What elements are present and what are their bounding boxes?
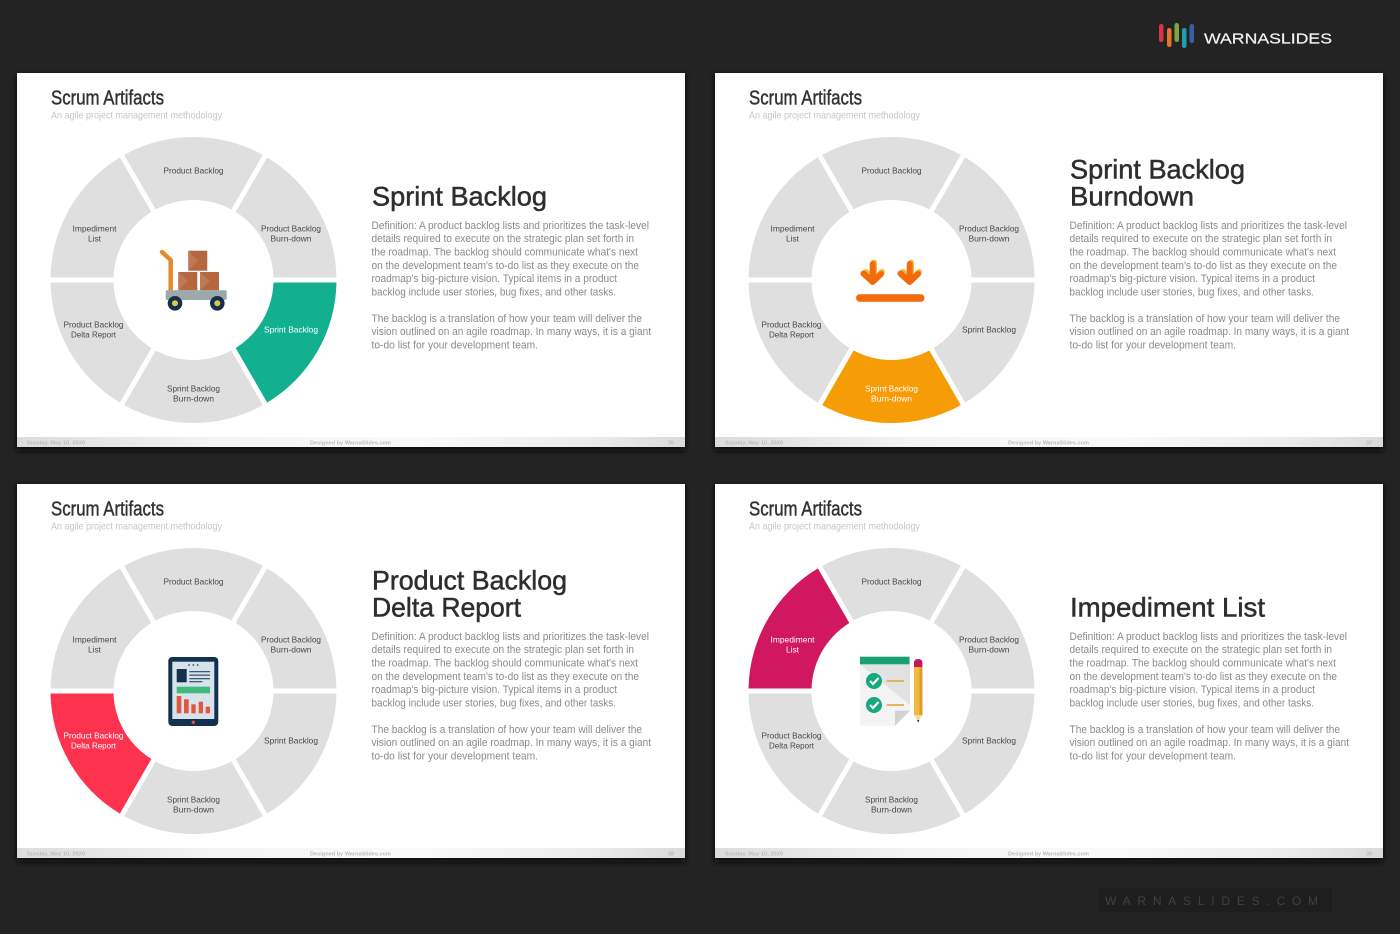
body text xyxy=(372,220,651,352)
body text: details required to execute on the strategic plan set forth in xyxy=(1070,233,1332,245)
donut chart: Delta Report xyxy=(71,329,117,339)
body text: The backlog is a translation of how your team will deliver the xyxy=(372,724,642,736)
body text: backlog include user stories, bug fixes, and other tasks. xyxy=(372,287,616,299)
footer: 38 xyxy=(668,852,674,858)
donut chart: Sprint Backlog xyxy=(264,735,318,745)
donut chart: Sprint Backlog xyxy=(865,383,918,393)
body text: Definition: A product backlog lists and prioritizes the task-level xyxy=(372,631,649,643)
donut chart: Product Backlog xyxy=(64,730,124,740)
footer: 39 xyxy=(1366,852,1372,858)
body text: the roadmap. The backlog should communicate what's next xyxy=(372,658,638,670)
body text: The backlog is a translation of how your team will deliver the xyxy=(1070,724,1340,736)
footer: Sunday, May 10, 2020 xyxy=(725,852,783,858)
donut chart: List xyxy=(88,233,102,243)
heading: Sprint Backlog xyxy=(372,182,547,212)
footer xyxy=(725,852,1372,858)
footer: Sunday, May 10, 2020 xyxy=(27,852,85,858)
body text: details required to execute on the strategic plan set forth in xyxy=(1070,644,1332,656)
donut chart: Product Backlog xyxy=(959,223,1019,233)
heading: Impediment List xyxy=(1070,592,1265,622)
footer: Sunday, May 10, 2020 xyxy=(725,440,783,446)
slide title xyxy=(51,88,223,121)
donut chart xyxy=(16,506,371,876)
slide title xyxy=(749,88,921,121)
body text xyxy=(372,631,651,763)
footer: Designed by WarnaSlides.com xyxy=(1008,852,1089,858)
slide: Sprint Backlog xyxy=(16,73,685,465)
body text: to-do list for your development team. xyxy=(1070,340,1236,352)
icon: checklist and pencil xyxy=(860,657,922,726)
donut chart: Delta Report xyxy=(71,740,117,750)
slide title: Scrum Artifacts xyxy=(749,88,862,110)
donut chart: Burn-down xyxy=(173,804,214,814)
icon: tablet with report xyxy=(168,657,218,726)
donut chart: Delta Report xyxy=(769,329,815,339)
body text: The backlog is a translation of how your team will deliver the xyxy=(1070,313,1340,325)
donut chart: List xyxy=(88,644,102,654)
donut chart: Product Backlog xyxy=(164,165,224,175)
slide title: An agile project management methodology xyxy=(749,520,921,532)
donut chart: Delta Report xyxy=(769,740,815,750)
heading: Product Backlog xyxy=(372,566,567,596)
body text: details required to execute on the strategic plan set forth in xyxy=(372,233,634,245)
donut chart: Product Backlog xyxy=(164,576,224,586)
watermark: warnaslides.com xyxy=(1098,888,1332,912)
body text: on the development team's to-do list as they execute on the xyxy=(1070,260,1337,272)
heading xyxy=(372,566,567,622)
body text: roadmap's big-picture vision. Typical items in a product xyxy=(372,684,617,696)
donut chart xyxy=(714,506,1069,876)
body text: details required to execute on the strategic plan set forth in xyxy=(372,644,634,656)
donut chart: Burn-down xyxy=(871,393,912,403)
donut chart: Sprint Backlog xyxy=(264,324,318,334)
footer: Designed by WarnaSlides.com xyxy=(1008,440,1089,446)
footer: Designed by WarnaSlides.com xyxy=(310,440,391,446)
donut chart: Impediment xyxy=(770,634,815,644)
body text: on the development team's to-do list as they execute on the xyxy=(372,260,639,272)
body text: the roadmap. The backlog should communicate what's next xyxy=(372,247,638,259)
donut chart: Impediment xyxy=(770,223,815,233)
footer: Designed by WarnaSlides.com xyxy=(310,852,391,858)
slide title xyxy=(51,499,223,532)
body text xyxy=(1070,631,1349,763)
body text: backlog include user stories, bug fixes, and other tasks. xyxy=(1070,698,1314,710)
footer: 37 xyxy=(1366,440,1372,446)
icon: down arrows over bar xyxy=(856,262,924,302)
heading: Sprint Backlog xyxy=(1070,154,1245,184)
slide title: Scrum Artifacts xyxy=(51,499,164,521)
slide title: An agile project management methodology xyxy=(51,109,223,121)
body text: Definition: A product backlog lists and prioritizes the task-level xyxy=(1070,631,1347,643)
body text: the roadmap. The backlog should communicate what's next xyxy=(1070,658,1336,670)
slide title: Scrum Artifacts xyxy=(749,499,862,521)
body text: Definition: A product backlog lists and prioritizes the task-level xyxy=(372,220,649,232)
body text: on the development team's to-do list as they execute on the xyxy=(372,671,639,683)
footer xyxy=(725,440,1372,446)
donut chart: Sprint Backlog xyxy=(167,383,220,393)
slide: Product Backlog Delta Report xyxy=(16,484,685,876)
footer xyxy=(27,440,674,446)
body text: to-do list for your development team. xyxy=(372,751,538,763)
slide title: An agile project management methodology xyxy=(51,520,223,532)
body text: vision outlined on an agile roadmap. In many ways, it is a giant xyxy=(1070,737,1349,749)
body text: on the development team's to-do list as they execute on the xyxy=(1070,671,1337,683)
body text xyxy=(1070,220,1349,352)
donut chart: Sprint Backlog xyxy=(167,794,220,804)
footer xyxy=(27,852,674,858)
footer: 36 xyxy=(668,440,674,446)
donut chart xyxy=(16,95,371,465)
donut chart: Burn-down xyxy=(968,233,1010,243)
heading xyxy=(1070,154,1245,212)
donut chart: Burn-down xyxy=(871,804,912,814)
body text: backlog include user stories, bug fixes, and other tasks. xyxy=(372,698,616,710)
body text: roadmap's big-picture vision. Typical items in a product xyxy=(1070,273,1315,285)
donut chart: List xyxy=(786,644,800,654)
donut chart: Product Backlog xyxy=(261,634,321,644)
heading: Burndown xyxy=(1070,182,1194,212)
donut chart: Product Backlog xyxy=(261,223,321,233)
donut chart: List xyxy=(786,233,800,243)
donut chart: Impediment xyxy=(72,223,117,233)
body text: The backlog is a translation of how your team will deliver the xyxy=(372,313,642,325)
donut chart: Product Backlog xyxy=(862,576,922,586)
watermark: warnaslides.com: WARNASLIDES.COM xyxy=(1105,894,1318,908)
donut chart: Product Backlog xyxy=(762,730,822,740)
slide: Sprint Backlog Burndown xyxy=(714,73,1383,465)
body text: the roadmap. The backlog should communicate what's next xyxy=(1070,247,1336,259)
body text: Definition: A product backlog lists and prioritizes the task-level xyxy=(1070,220,1347,232)
body text: vision outlined on an agile roadmap. In many ways, it is a giant xyxy=(372,326,651,338)
donut chart: Product Backlog xyxy=(862,165,922,175)
logo: WarnaSlides: WARNASLIDES xyxy=(1204,30,1332,48)
donut chart: Burn-down xyxy=(270,233,312,243)
slide title: An agile project management methodology xyxy=(749,109,921,121)
icon: hand cart with boxes xyxy=(162,251,227,311)
donut chart: Impediment xyxy=(72,634,117,644)
body text: vision outlined on an agile roadmap. In many ways, it is a giant xyxy=(372,737,651,749)
donut chart: Sprint Backlog xyxy=(962,735,1016,745)
donut chart: Product Backlog xyxy=(959,634,1019,644)
donut chart: Product Backlog xyxy=(762,319,822,329)
donut chart xyxy=(714,95,1069,465)
body text: backlog include user stories, bug fixes, and other tasks. xyxy=(1070,287,1314,299)
donut chart: Burn-down xyxy=(270,644,312,654)
footer: Sunday, May 10, 2020 xyxy=(27,440,85,446)
donut chart: Sprint Backlog xyxy=(865,794,918,804)
body text: to-do list for your development team. xyxy=(1070,751,1236,763)
donut chart: Product Backlog xyxy=(64,319,124,329)
heading: Delta Report xyxy=(372,592,521,622)
slide title xyxy=(749,499,921,532)
donut chart: Burn-down xyxy=(968,644,1010,654)
slide title: Scrum Artifacts xyxy=(51,88,164,110)
body text: to-do list for your development team. xyxy=(372,340,538,352)
slide: Impediment List xyxy=(714,484,1383,876)
body text: roadmap's big-picture vision. Typical items in a product xyxy=(372,273,617,285)
body text: vision outlined on an agile roadmap. In many ways, it is a giant xyxy=(1070,326,1349,338)
donut chart: Sprint Backlog xyxy=(962,324,1016,334)
body text: roadmap's big-picture vision. Typical items in a product xyxy=(1070,684,1315,696)
donut chart: Burn-down xyxy=(173,393,214,403)
logo: WarnaSlides xyxy=(1159,23,1332,48)
